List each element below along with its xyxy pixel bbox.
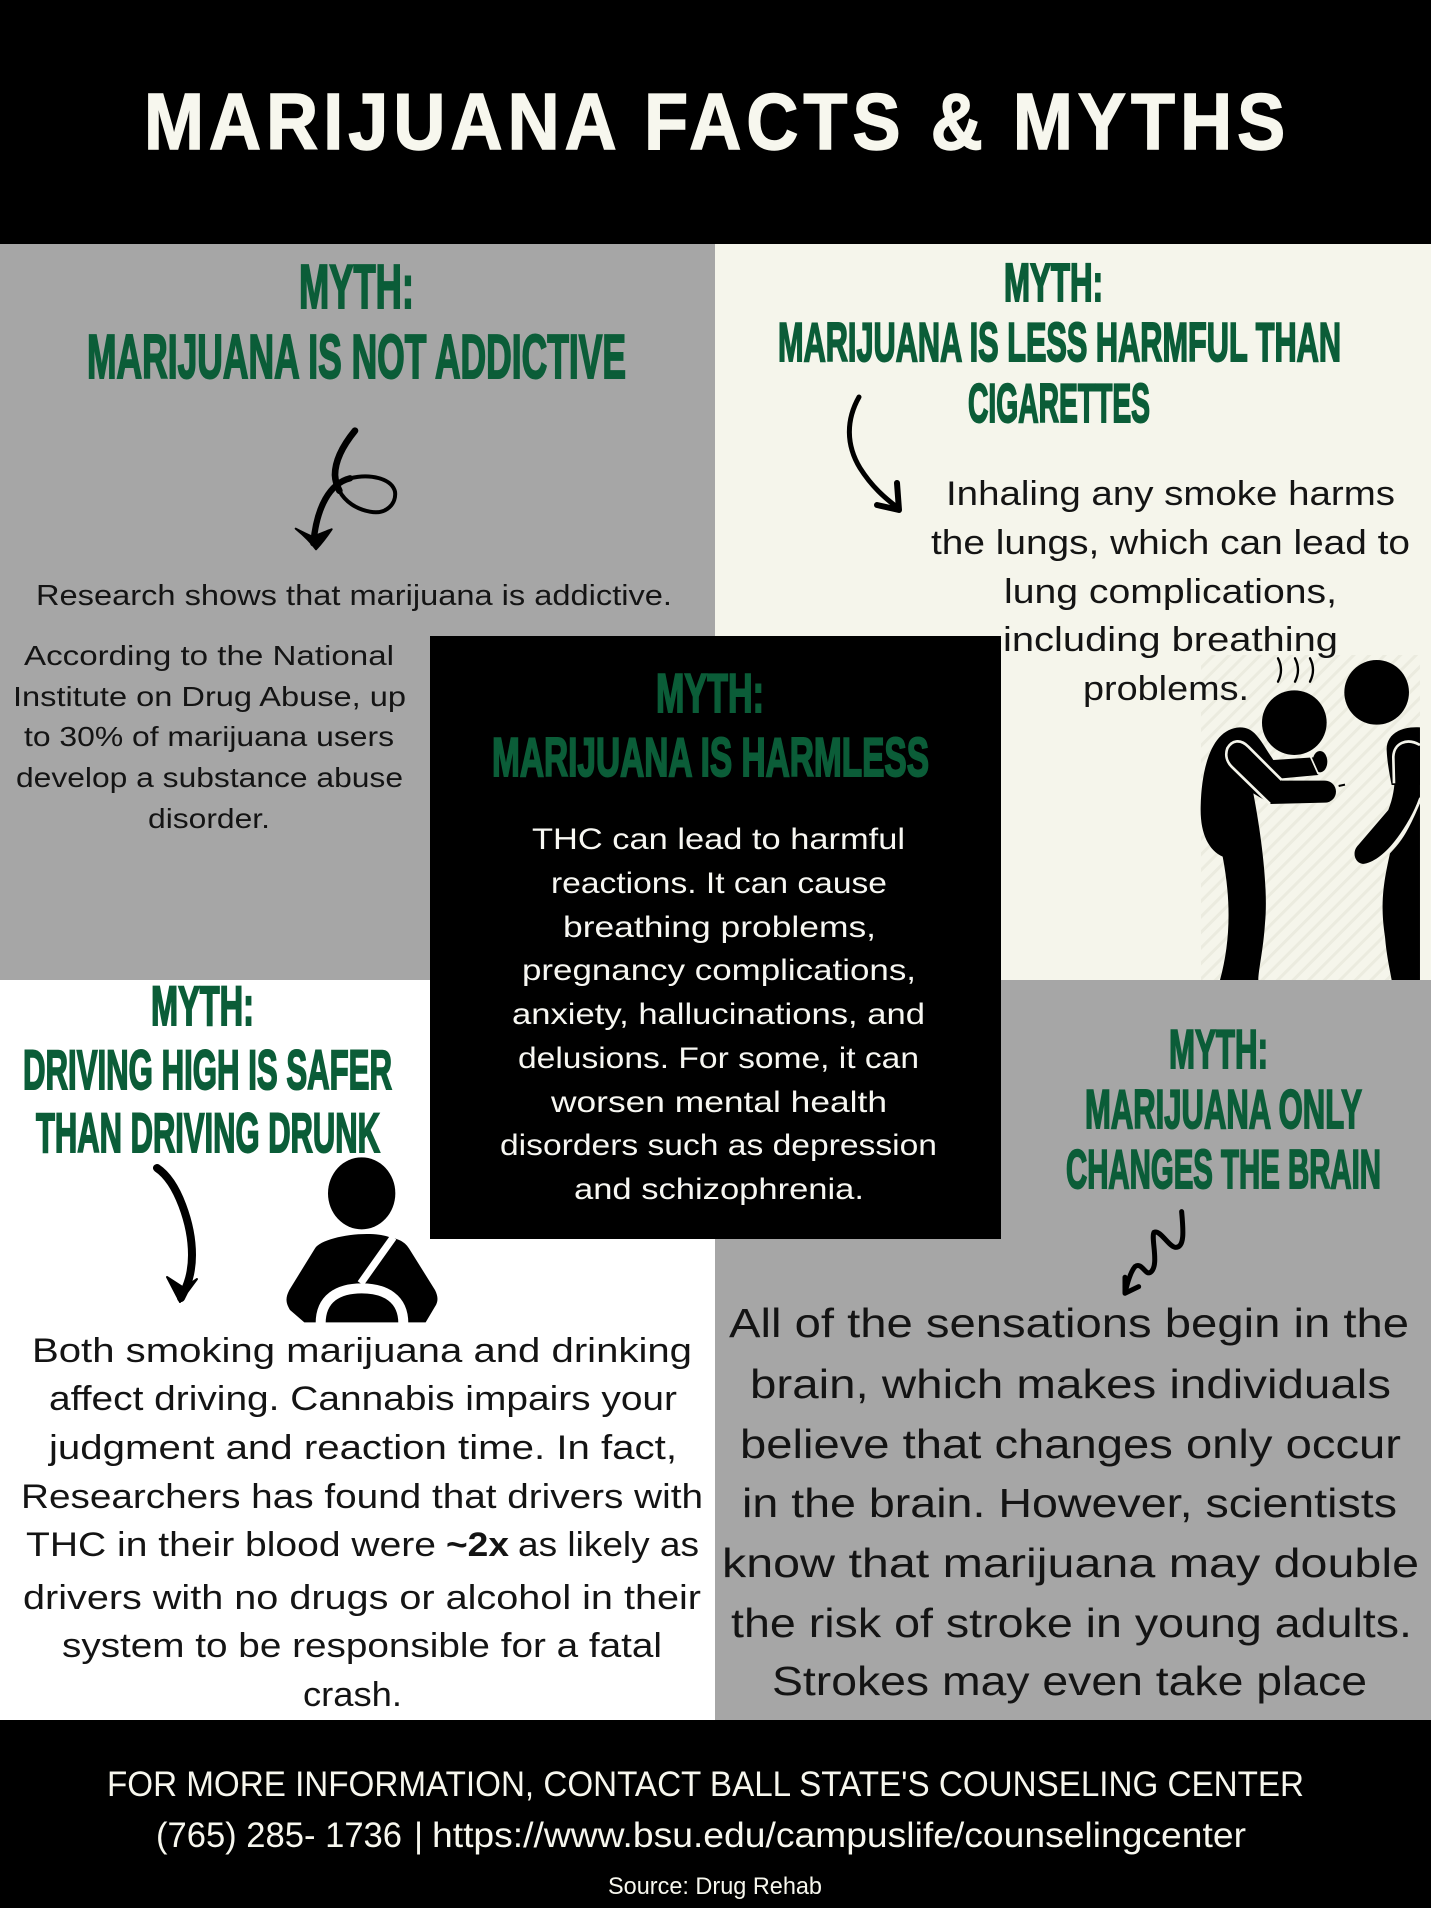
text: thc effects: pregnancy complications, (522, 954, 916, 987)
icon: smoke (1278, 658, 1313, 682)
text: both smoking and drinking: judgment and reaction time. In fact, (48, 1429, 677, 1467)
text: national institute statistic: disorder. (148, 803, 270, 834)
text: all sensations: All of the sensations begin in the (729, 1300, 1409, 1346)
panel: harmless (center) (430, 636, 1001, 1239)
text: inhaling smoke: problems. (1083, 670, 1249, 708)
text: all sensations: know that marijuana may double (722, 1540, 1419, 1586)
icon: two people smoking (1201, 655, 1420, 980)
text: inhaling smoke: the lungs, which can lead to (931, 524, 1410, 562)
heading: myth not addictive: MYTH: (299, 253, 414, 322)
text: contact line: FOR MORE INFORMATION, CONTACT BALL STATE'S COUNSELING CENTER (107, 1765, 1304, 1804)
text: thc effects: breathing problems, (563, 911, 876, 944)
arrow: zigzag (1125, 1212, 1183, 1293)
heading: myth driving: THAN DRIVING DRUNK (36, 1101, 380, 1164)
heading: myth cigarettes (778, 253, 1341, 434)
heading: myth harmless: MYTH: (656, 662, 764, 724)
heading: myth not addictive (87, 253, 626, 392)
panel: only changes the brain (715, 980, 1431, 1720)
icon: person one (1201, 690, 1345, 980)
text: national institute statistic: Institute on Drug Abuse, up (13, 681, 406, 712)
text: thc effects: disorders such as depression (500, 1129, 937, 1162)
heading: myth driving: MYTH: (151, 974, 254, 1037)
arrow: looped (296, 431, 395, 549)
icon: person two (1344, 660, 1420, 980)
text: both smoking and drinking (21, 1332, 703, 1714)
heading: myth harmless: MARIJUANA IS HARMLESS (492, 726, 929, 788)
text: all sensations: the risk of stroke in young adults. (731, 1600, 1412, 1646)
heading: myth driving: DRIVING HIGH IS SAFER (23, 1038, 392, 1101)
text: both smoking and drinking: drivers with no drugs or alcohol in their (23, 1579, 701, 1617)
text: inhaling smoke (931, 475, 1410, 708)
text: national institute statistic (13, 640, 406, 834)
heading: myth cigarettes: MYTH: (1004, 253, 1103, 313)
text: both smoking and drinking: affect driving. Cannabis impairs your (49, 1380, 677, 1418)
heading: myth harmless (492, 662, 929, 788)
panel: not addictive (0, 244, 715, 980)
text: inhaling smoke: Inhaling any smoke harms (946, 475, 1395, 513)
text: both smoking and drinking: Both smoking marijuana and drinking (32, 1332, 692, 1370)
text: research shows: Research shows that marijuana is addictive. (36, 580, 672, 612)
text: inhaling smoke: including breathing (1003, 621, 1338, 659)
title: MARIJUANA FACTS & MYTHS (144, 78, 1285, 167)
icon: driver with steering wheel (287, 1157, 437, 1323)
text: both smoking and drinking: Researchers has found that drivers with (21, 1478, 703, 1516)
text: thc effects: delusions. For some, it can (518, 1042, 919, 1075)
text: phone and url: | (414, 1816, 423, 1855)
text: both smoking and drinking: THC in their blood were (26, 1526, 436, 1564)
text: all sensations: Strokes may even take place (772, 1658, 1367, 1704)
text: national institute statistic: to 30% of marijuana users (24, 721, 394, 752)
heading: myth not addictive: MARIJUANA IS NOT ADDICTIVE (87, 323, 626, 392)
text: national institute statistic: According to the National (24, 640, 394, 671)
arrow: downward (157, 1168, 197, 1302)
text: thc effects: anxiety, hallucinations, and (512, 998, 925, 1031)
text: both smoking and drinking: crash. (303, 1676, 402, 1714)
panel: driving high (0, 974, 715, 1720)
text: thc effects: THC can lead to harmful (532, 823, 905, 856)
heading: myth brain: MYTH: (1169, 1018, 1268, 1080)
text: thc effects: and schizophrenia. (574, 1173, 864, 1206)
text: phone and url: (765) 285- 1736 (156, 1816, 402, 1855)
text: both smoking and drinking: ~2x (446, 1526, 509, 1564)
header band (0, 0, 1431, 244)
heading: myth driving (23, 974, 392, 1164)
text: inhaling smoke: lung complications, (1004, 573, 1337, 611)
text: source: Source: Drug Rehab (608, 1873, 822, 1900)
text: thc effects: worsen mental health (550, 1086, 887, 1119)
text: both smoking and drinking: system to be responsible for a fatal (62, 1627, 662, 1665)
text: thc effects: reactions. It can cause (551, 867, 887, 900)
text: both smoking and drinking: as likely as (518, 1526, 699, 1564)
text: all sensations: brain, which makes individuals (750, 1361, 1391, 1407)
text: thc effects (500, 823, 937, 1206)
panel: less harmful than cigarettes (715, 244, 1431, 980)
text: all sensations (722, 1300, 1419, 1704)
heading: myth cigarettes: CIGARETTES (968, 372, 1150, 434)
heading: myth brain (1066, 1018, 1381, 1200)
text: phone and url: https://www.bsu.edu/campuslife/counselingcenter (432, 1816, 1246, 1855)
arrow: curved to text (849, 397, 899, 510)
footer band (0, 1720, 1431, 1908)
text: all sensations: in the brain. However, scientists (742, 1480, 1397, 1526)
text: national institute statistic: develop a substance abuse (16, 762, 403, 793)
text: all sensations: believe that changes only occur (740, 1421, 1401, 1467)
